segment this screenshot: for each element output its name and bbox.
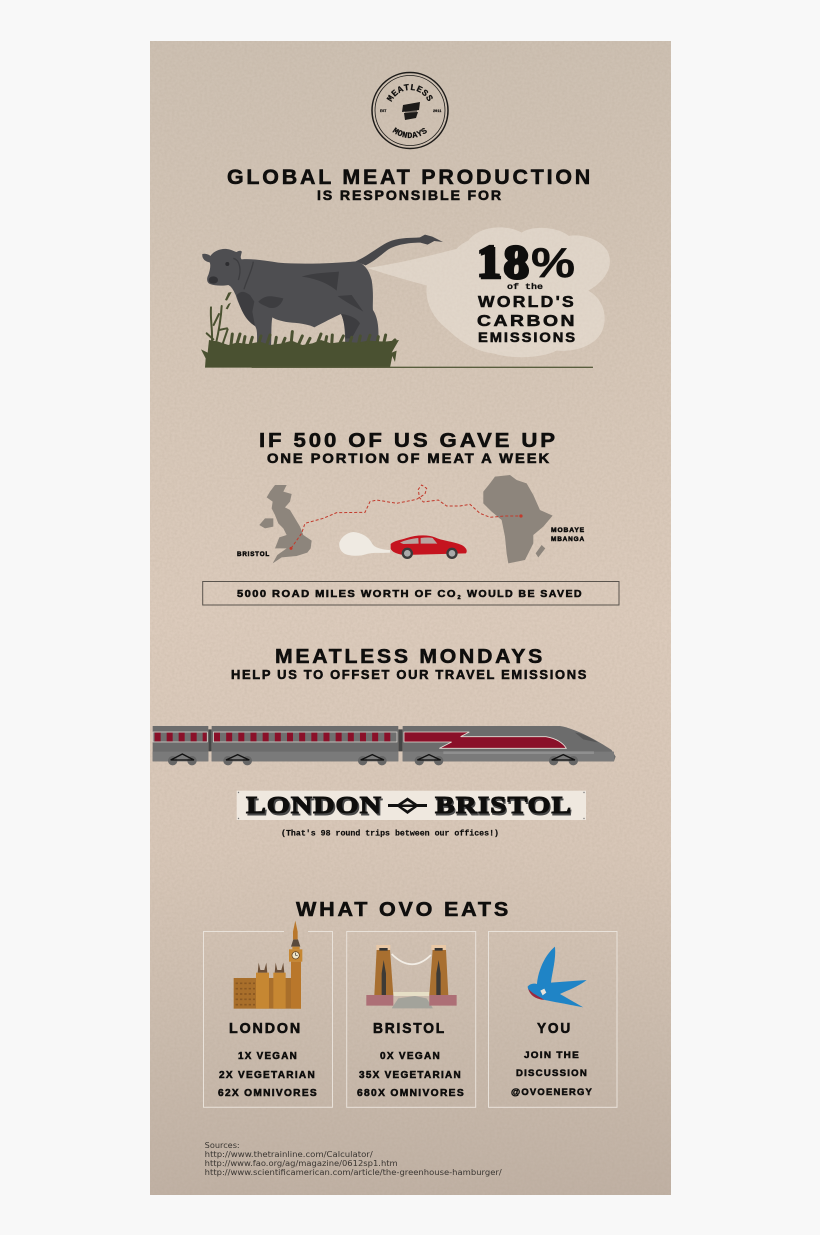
- cow shading: [237, 272, 363, 338]
- sources: http://www.fao.org/ag/magazine/0612sp1.htm: [205, 1159, 398, 1168]
- sign: London to Bristol: LONDON: [246, 792, 382, 819]
- sources: http://www.thetrainline.com/Calculator/: [205, 1150, 373, 1159]
- cow tail: [356, 235, 443, 265]
- emission cloud and plume: [367, 227, 610, 357]
- callout: 5000 road miles: 2: [458, 595, 461, 601]
- panel: You: [488, 932, 617, 1107]
- sources: Sources:: [205, 1141, 240, 1150]
- locomotive: [403, 726, 616, 761]
- heading: what ovo eats: WHAT OVO EATS: [296, 899, 511, 921]
- stat: 18% of the world's carbon emissions: EMISSIONS: [478, 329, 577, 345]
- note: round trips: (That's 98 round trips between our offices!): [281, 828, 499, 838]
- exhaust cloud: [339, 532, 390, 556]
- sign: London to Bristol: LONDON: [248, 794, 384, 821]
- panel: You: DISCUSSION: [516, 1068, 588, 1079]
- panel: Bristol: 0X VEGAN: [380, 1051, 441, 1062]
- stat: 18% of the world's carbon emissions: 18: [476, 236, 530, 288]
- callout: 5000 road miles: 5000 ROAD MILES WORTH OF CO: [237, 588, 457, 600]
- panel: London: 2X VEGETARIAN: [219, 1070, 316, 1081]
- logo: Meatless Mondays stamp: [371, 72, 449, 150]
- icon: high speed train: [153, 726, 616, 765]
- car body: [391, 535, 467, 555]
- heading: if 500 of us gave up: [259, 430, 558, 466]
- panel: London: 1X VEGAN: [238, 1051, 298, 1062]
- panel: Bristol: 680X OMNIVORES: [357, 1088, 465, 1099]
- stat: 18% of the world's carbon emissions: CARBON: [477, 313, 577, 330]
- stat: 18% of the world's carbon emissions: WORLD'S: [478, 294, 576, 311]
- heading: if 500 of us gave up: IF 500 OF US GAVE UP: [259, 430, 558, 452]
- callout: 5000 road miles: [203, 582, 619, 605]
- stat: 18% of the world's carbon emissions: of the: [507, 283, 543, 292]
- panel: You: JOIN THE: [524, 1050, 580, 1061]
- panel: London: 62X OMNIVORES: [218, 1088, 318, 1099]
- locomotive stripe: [404, 732, 566, 748]
- heading: global meat production: IS RESPONSIBLE FOR: [317, 187, 503, 203]
- icon: blue swallow: [528, 947, 587, 1007]
- couplings: [208, 729, 403, 751]
- sources: http://www.scientificamerican.com/article/the-greenhouse-hamburger/: [205, 1168, 502, 1177]
- icon: Clifton suspension bridge: [366, 945, 457, 1008]
- carriage 2: [212, 726, 398, 761]
- panel: You: YOU: [537, 1021, 572, 1037]
- panel: London: [204, 921, 332, 1107]
- map: Bristol to Mobaye Mbanga route: BRISTOL: [237, 551, 270, 558]
- cow body: [202, 249, 379, 347]
- map of Britain: [259, 485, 312, 563]
- 18 shadow and numerals: 18: [478, 238, 532, 290]
- carriage 1: [153, 726, 208, 761]
- heading: global meat production: [227, 166, 593, 203]
- logo: Meatless Mondays stamp: MONDAYS: [392, 127, 427, 138]
- heading: meatless mondays: [231, 646, 588, 682]
- panel: Bristol: 35X VEGETARIAN: [359, 1070, 462, 1081]
- sign: London to Bristol: BRISTOL: [435, 792, 572, 819]
- panel: London: LONDON: [229, 1021, 302, 1037]
- heading: global meat production: GLOBAL MEAT PRODUCTION: [227, 166, 593, 189]
- icon: Parliament and Big Ben: [234, 921, 302, 1009]
- map: Bristol to Mobaye Mbanga route: MOBAYE: [551, 527, 585, 534]
- bogies: [168, 756, 578, 765]
- stat: 18% of the world's carbon emissions: %: [531, 239, 575, 286]
- panel: Bristol: [347, 932, 476, 1107]
- paper background panel: [150, 41, 671, 1195]
- icon: red car with exhaust: [339, 532, 467, 559]
- logo: Meatless Mondays stamp: 2011: [433, 110, 441, 114]
- heading: if 500 of us gave up: ONE PORTION OF MEAT A WEEK: [267, 451, 551, 466]
- logo: Meatless Mondays stamp: EST: [380, 110, 386, 114]
- dashed route: [291, 485, 521, 548]
- logo: Meatless Mondays stamp: MEATLESS: [386, 84, 433, 102]
- sources: [205, 1141, 502, 1177]
- icon: cow on grass: [201, 235, 593, 368]
- sign: London to Bristol: BRISTOL: [436, 794, 573, 821]
- heading: meatless mondays: HELP US TO OFFSET OUR TRAVEL EMISSIONS: [231, 667, 588, 682]
- grass: [201, 340, 399, 368]
- sign: London to Bristol: [237, 791, 586, 821]
- map of Africa: [483, 475, 553, 563]
- map: Bristol to Mobaye Mbanga route: MBANGA: [551, 536, 585, 543]
- callout: 5000 road miles: WOULD BE SAVED: [467, 588, 583, 600]
- heading: meatless mondays: MEATLESS MONDAYS: [275, 646, 545, 668]
- panel: You: @OVOENERGY: [511, 1087, 593, 1098]
- stat: 18% of the world's carbon emissions: [476, 236, 577, 345]
- panel: Bristol: BRISTOL: [373, 1021, 446, 1037]
- window bands: [153, 732, 207, 742]
- map: Bristol to Mobaye Mbanga route: [237, 475, 585, 563]
